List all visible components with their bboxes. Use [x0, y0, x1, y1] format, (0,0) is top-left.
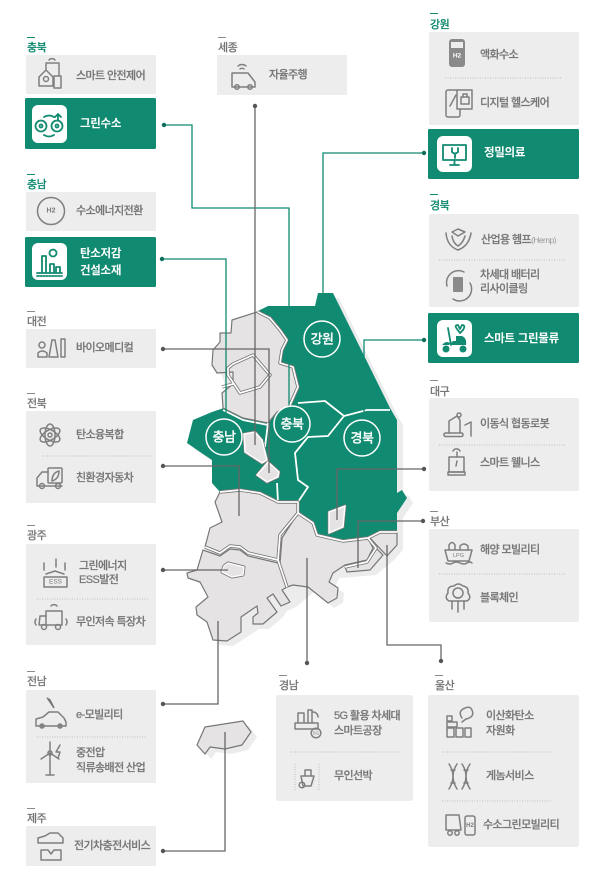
icon: 5G smart factory: 5G	[313, 730, 319, 736]
heading: 경남: 경남	[279, 679, 299, 692]
gyeonggi east border	[258, 312, 298, 405]
southern province borders	[205, 490, 397, 587]
text: 차세대 배터리 리사이클링: 차세대 배터리	[480, 267, 540, 281]
text: 탄소융복합: 탄소융복합	[76, 427, 124, 441]
text: 무인선박: 무인선박	[334, 769, 373, 782]
text: 5G 활용 차세대 스마트공장: 5G 활용 차세대	[334, 708, 400, 722]
text: 자율주행: 자율주행	[269, 68, 308, 81]
busan	[345, 548, 383, 572]
icon: precision medicine monitor	[443, 145, 466, 165]
heading: 제주: 제주	[27, 812, 47, 825]
daejeon	[257, 462, 279, 482]
text: 이산화탄소 자원화: 이산화탄소	[486, 709, 534, 722]
text: e-모빌리티: e-모빌리티	[76, 708, 123, 721]
text: 중전압 직류송배전 산업	[76, 746, 145, 774]
heading: 경북: 경북	[430, 199, 450, 212]
panel: 전남	[26, 671, 156, 783]
text: 중전압 직류송배전 산업: 직류송배전 산업	[76, 761, 145, 774]
text: 차세대 배터리 리사이클링	[480, 267, 540, 295]
green regions: gangwon, chungbuk, chungnam, gyeongbuk	[187, 293, 407, 541]
heading: 강원	[430, 13, 450, 31]
region marker: 경북: 경북	[351, 430, 374, 446]
icon: LPG ship: LPG	[453, 553, 464, 559]
text: 스마트 안전제어: 스마트 안전제어	[76, 69, 145, 82]
text: 이산화탄소 자원화	[486, 709, 534, 737]
panel: 제주	[26, 808, 156, 866]
map of South Korea	[187, 293, 413, 759]
region marker: 충남	[206, 419, 242, 455]
text: 이산화탄소 자원화: 자원화	[486, 723, 515, 737]
text: 중전압 직류송배전 산업: 중전압	[76, 746, 105, 759]
panel: 전북	[26, 393, 156, 503]
panel: 경북	[428, 194, 579, 363]
text: 디지털 헬스케어: 디지털 헬스케어	[480, 96, 549, 109]
region marker: 경북	[344, 420, 380, 456]
heading: 전남: 전남	[27, 675, 47, 688]
daegu	[329, 506, 345, 533]
heading: 광주: 광주	[27, 529, 47, 542]
text: 무인저속 특장차: 무인저속 특장차	[76, 615, 146, 628]
panel: 대전	[26, 311, 156, 368]
heading: 경북	[430, 194, 450, 212]
connector: 광주	[161, 568, 228, 572]
sejong	[244, 432, 267, 463]
text: 탄소저감 건설소재	[80, 246, 122, 277]
connector: 충북 그린수소	[162, 123, 289, 405]
text: 친환경자동차: 친환경자동차	[76, 470, 134, 484]
gyeonggi region	[212, 312, 298, 423]
icon: battery recycling	[447, 271, 472, 301]
connector: 전북	[161, 464, 239, 516]
icon: collaborative robot	[444, 413, 471, 436]
text: 5G 활용 차세대 스마트공장: 스마트공장	[334, 724, 382, 737]
panel: 세종	[217, 37, 347, 95]
connector: 부산	[358, 519, 425, 568]
heading: 대구	[430, 380, 450, 398]
text: 블록체인: 블록체인	[480, 591, 519, 604]
icon: ev charging	[38, 833, 63, 860]
icon: atom	[38, 424, 62, 446]
region marker: 충북	[274, 406, 310, 442]
connector: 충남 탄소저감	[160, 257, 226, 420]
heading: 충남: 충남	[27, 178, 47, 191]
gyeongnam	[280, 513, 373, 603]
text: 수소에너지전환: 수소에너지전환	[76, 204, 143, 217]
seoul	[222, 355, 270, 393]
heading: 대구: 대구	[430, 384, 450, 398]
ulsan	[370, 532, 397, 556]
heading: 부산: 부산	[430, 515, 450, 528]
connector: 제주	[161, 732, 225, 853]
text: 바이오메디컬: 바이오메디컬	[76, 341, 134, 354]
panel: 강원	[428, 13, 579, 179]
connector: 대구	[337, 467, 426, 520]
panel: 광주	[26, 525, 156, 645]
icon: autonomous van	[232, 64, 255, 89]
region marker: 충남: 충남	[213, 430, 236, 444]
icon: liquid hydrogen	[449, 39, 465, 67]
panel: 대구	[429, 380, 579, 491]
icon: e-mobility car	[36, 698, 66, 729]
icon: unmanned ship	[295, 764, 319, 790]
connector: 울산	[387, 545, 443, 663]
icon: green hydrogen	[36, 114, 62, 136]
heading: 세종: 세종	[218, 41, 238, 54]
icon: LPG ship	[445, 542, 472, 564]
region marker: 충북: 충북	[281, 416, 304, 432]
icon: hydrogen mobility: H2	[466, 823, 474, 829]
icon: DNA	[449, 764, 470, 789]
icon: hemp hands	[446, 229, 471, 250]
text: 수소그린모빌리티: 수소그린모빌리티	[483, 818, 559, 831]
connector: 세종	[253, 104, 257, 445]
jeju	[197, 721, 251, 754]
icon: blockchain	[446, 584, 470, 612]
panel: 부산	[429, 511, 579, 622]
icon: liquid hydrogen: H2	[453, 52, 462, 60]
icon: wind turbine	[41, 742, 60, 775]
text: 해양 모빌리티: 해양 모빌리티	[480, 543, 540, 556]
text: 스마트 웰니스: 스마트 웰니스	[480, 455, 540, 469]
map shadow	[193, 298, 413, 759]
connector: 경북 스마트 그린물류	[364, 338, 426, 417]
region marker: 강원	[304, 321, 340, 357]
heading: 충북: 충북	[27, 41, 47, 54]
icon: CO2 resource	[447, 707, 473, 737]
heading: 대전: 대전	[27, 314, 47, 328]
heading: 강원: 강원	[430, 17, 450, 31]
jeonnam	[187, 549, 290, 641]
heading: 전북: 전북	[27, 397, 47, 410]
icon: hydrogen mobility	[446, 815, 475, 835]
heading: 부산	[430, 511, 450, 528]
icon: smart wellness	[448, 449, 465, 475]
icon: low carbon material	[37, 250, 62, 276]
panel: 충북	[25, 37, 156, 149]
icon: digital healthcare	[446, 90, 472, 117]
icon: hydrogen cycle: H2	[47, 208, 56, 214]
icon: ESS generation: ESS	[49, 578, 63, 586]
region marker: 강원: 강원	[311, 332, 333, 346]
text: 그린수소: 그린수소	[80, 117, 122, 130]
text: 산업용 헴프(Hemp): 산업용 헴프(Hemp)	[481, 233, 557, 246]
text: 5G 활용 차세대 스마트공장	[334, 708, 400, 737]
panel: 울산	[428, 675, 579, 847]
text: 스마트 그린물류: 스마트 그린물류	[484, 332, 560, 345]
connector: 대전	[161, 347, 269, 473]
text: 탄소저감 건설소재: 건설소재	[80, 263, 121, 277]
text: 정밀의료: 정밀의료	[484, 145, 526, 159]
gwangju	[222, 563, 244, 577]
text: 탄소저감 건설소재: 탄소저감	[80, 246, 122, 260]
connector lines	[160, 104, 443, 853]
panel: 충남	[25, 174, 156, 287]
text: 그린에너지 ESS발전: ESS발전	[79, 573, 119, 586]
jeonbuk	[205, 490, 298, 560]
green region borders	[223, 401, 390, 502]
text: 전기차충전서비스: 전기차충전서비스	[74, 839, 151, 852]
connector: 경남	[305, 558, 309, 665]
icon: biomedical	[38, 339, 65, 357]
icon: autonomous low speed vehicle	[35, 605, 67, 630]
text: 그린에너지 ESS발전: 그린에너지	[79, 559, 127, 572]
panel: 경남	[276, 675, 413, 801]
text: 게놈서비스: 게놈서비스	[486, 768, 534, 782]
icon: green logistics scooter	[442, 325, 466, 352]
text: 액화수소: 액화수소	[480, 48, 519, 61]
heading: 울산: 울산	[435, 679, 455, 692]
text: 차세대 배터리 리사이클링: 리사이클링	[480, 282, 528, 295]
heading: 울산	[435, 675, 455, 692]
icon: eco truck	[37, 468, 62, 488]
text: 그린에너지 ESS발전	[79, 559, 127, 586]
connector: 전남	[161, 621, 218, 706]
icon: smart home	[39, 59, 61, 88]
text: 이동식 협동로봇: 이동식 협동로봇	[480, 416, 550, 430]
connector: 강원 정밀의료	[323, 151, 426, 318]
